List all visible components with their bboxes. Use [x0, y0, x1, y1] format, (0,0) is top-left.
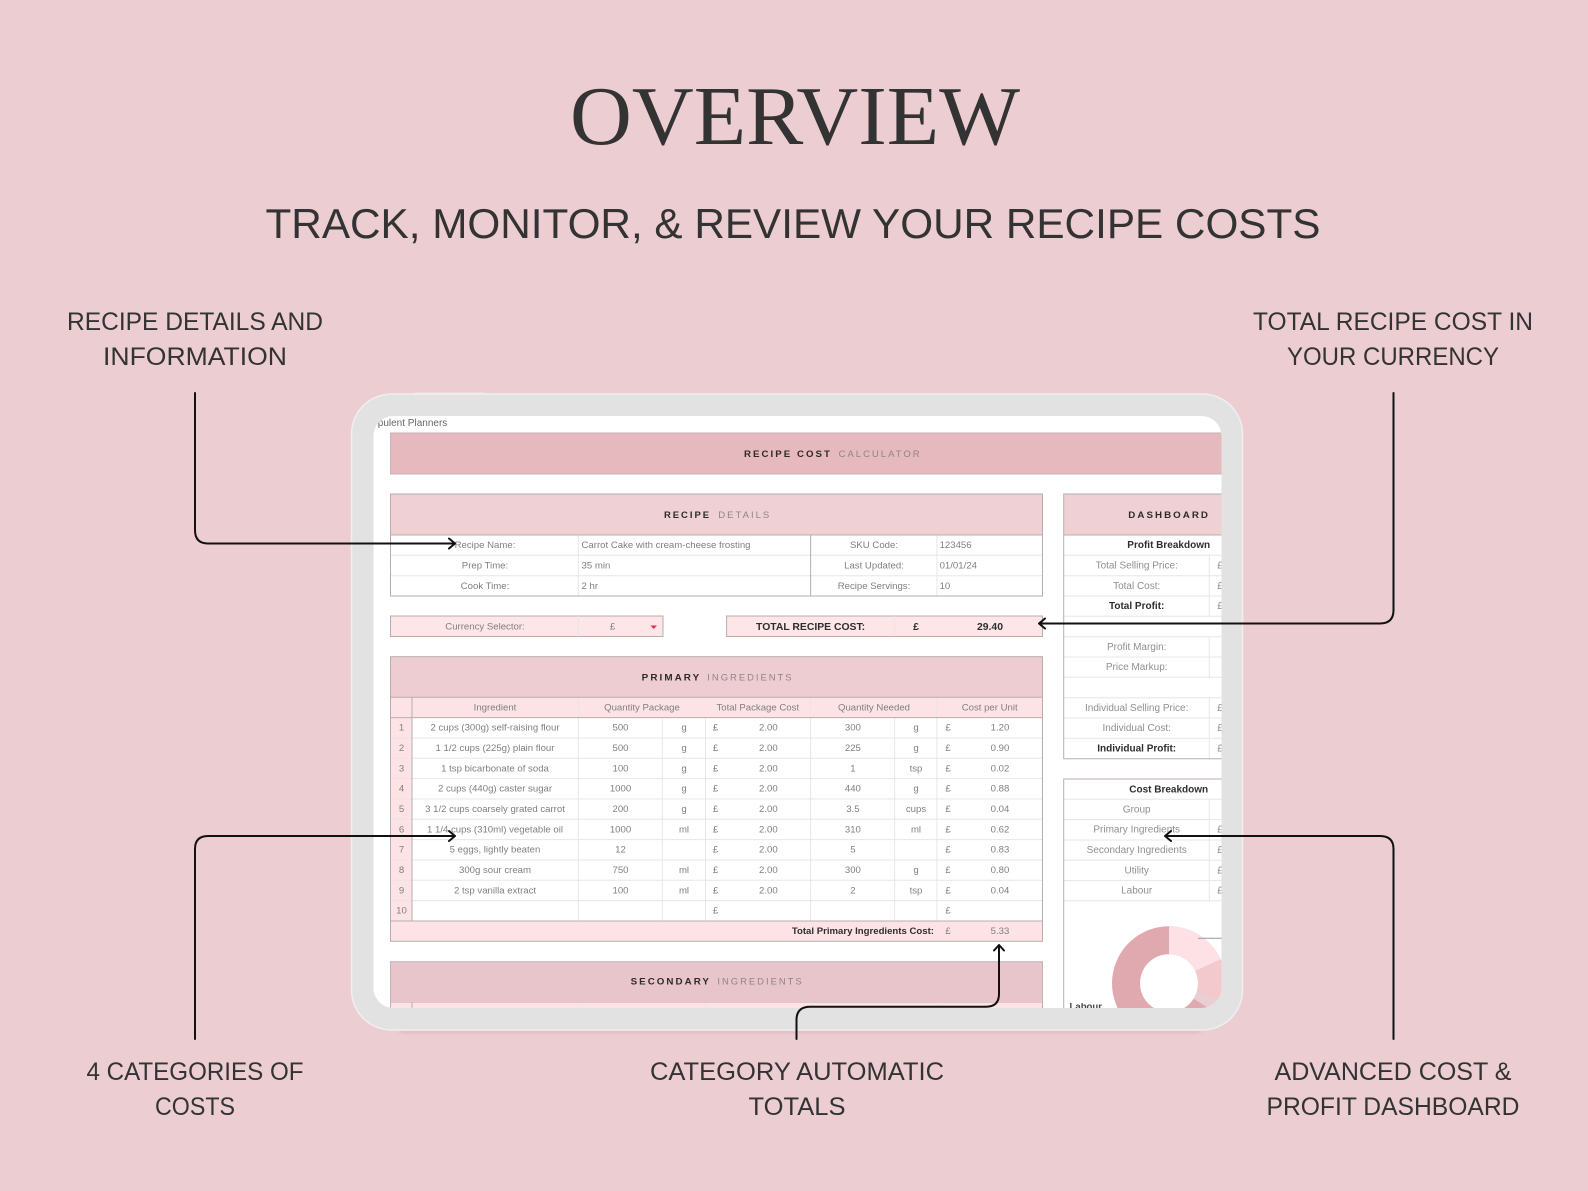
- panel: recipe details: Recipe Name:: [455, 540, 515, 551]
- column headers: Ingredient: [474, 702, 517, 713]
- panel: dashboard profit breakdown: Profit Margin:: [1107, 642, 1166, 653]
- row 7: 12: [615, 845, 626, 856]
- row 5: 2.00: [759, 804, 778, 815]
- row 2: £: [945, 743, 951, 754]
- panel: secondary ingredients: SECONDARY: [631, 976, 711, 988]
- panel: recipe details: SKU Code:: [850, 540, 898, 551]
- total primary ingredients row: 5.33: [991, 926, 1009, 937]
- row 9: tsp: [910, 885, 922, 896]
- spreadsheet screen: [370, 418, 1234, 1026]
- row 5: £: [713, 804, 719, 815]
- row 4: 1000: [610, 784, 631, 795]
- callout text: categories of costs: [86, 1058, 304, 1121]
- row 3: 2.00: [759, 763, 778, 774]
- banner: recipe cost calculator: RECIPE COST: [744, 449, 832, 460]
- panel: cost breakdown: £: [1217, 825, 1223, 836]
- panel: dashboard profit breakdown: £: [1217, 601, 1223, 612]
- row 5: [399, 806, 1010, 814]
- panel: secondary ingredients: INGREDIENTS: [717, 976, 804, 988]
- row 9: 2: [850, 885, 856, 896]
- row 2: [399, 744, 1009, 753]
- callout text: total recipe cost: YOUR CURRENCY: [1287, 343, 1499, 371]
- panel: cost breakdown: Utility: [1124, 865, 1149, 876]
- panel: cost breakdown: Secondary Ingredients: [1087, 845, 1187, 856]
- donut chart: [1126, 940, 1212, 1026]
- currency selector: £: [610, 621, 616, 632]
- row 3: £: [713, 763, 719, 774]
- callout text: categories of costs: COSTS: [155, 1093, 235, 1121]
- column headers: [390, 697, 1042, 718]
- callout text: dashboard: PROFIT DASHBOARD: [1266, 1093, 1520, 1121]
- callout text: dashboard: ADVANCED COST &: [1274, 1058, 1512, 1086]
- callout text: automatic totals: CATEGORY AUTOMATIC: [650, 1058, 944, 1086]
- arrow: recipe details: [195, 393, 455, 548]
- row 4: 2 cups (440g) caster sugar: [438, 784, 553, 795]
- row 2: 2.00: [759, 743, 778, 754]
- panel: recipe details: Last Updated:: [844, 561, 904, 572]
- callout text: total recipe cost: [1253, 308, 1533, 371]
- callout text: automatic totals: TOTALS: [748, 1093, 846, 1121]
- row 5: 3 1/2 cups coarsely grated carrot: [425, 804, 565, 815]
- row 6: ml: [679, 824, 689, 835]
- row 8: 750: [612, 865, 629, 876]
- panel: dashboard profit breakdown: [1064, 494, 1234, 759]
- currency selector: Currency Selector:: [445, 621, 525, 632]
- row 1: £: [945, 723, 951, 734]
- panel: primary ingredients table: INGREDIENTS: [707, 673, 794, 684]
- row 6: 1000: [610, 824, 631, 835]
- callout text: total recipe cost: TOTAL RECIPE COST IN: [1253, 308, 1533, 336]
- row 10: £: [713, 906, 719, 917]
- panel: cost breakdown: [1064, 779, 1223, 1026]
- row 7: 7: [399, 845, 404, 856]
- row 3: £: [945, 763, 951, 774]
- row 5: £: [945, 804, 951, 815]
- column headers: Cost per Unit: [962, 702, 1018, 713]
- row 2: 0.90: [991, 743, 1009, 754]
- row 1: 500: [612, 723, 629, 734]
- callout text: recipe details: INFORMATION: [103, 343, 287, 371]
- total primary ingredients row: [792, 928, 1009, 936]
- column headers: Total Package Cost: [716, 702, 799, 713]
- infographic canvas: [69, 88, 1531, 1115]
- row 4: £: [713, 784, 719, 795]
- row 5: cups: [906, 804, 926, 815]
- panel: dashboard profit breakdown: Profit Breakdown: [1127, 540, 1210, 551]
- panel: dashboard profit breakdown: £: [1217, 744, 1223, 754]
- total recipe cost box: 29.40: [977, 622, 1003, 633]
- arrow: dashboard: [1165, 831, 1394, 1039]
- row 2: 2: [399, 743, 404, 754]
- banner: recipe cost calculator: CALCULATOR: [839, 449, 922, 460]
- row 7: 5: [850, 845, 856, 856]
- panel: dashboard profit breakdown: £: [1217, 703, 1223, 714]
- row 9: 2 tsp vanilla extract: [454, 885, 536, 896]
- panel: recipe details: 01/01/24: [940, 561, 978, 572]
- row 3: 0.02: [991, 763, 1009, 774]
- row 1: g: [913, 723, 919, 734]
- row 9: 9: [399, 885, 404, 896]
- row 4: 2.00: [759, 784, 778, 795]
- panel: recipe details: 123456: [940, 540, 972, 551]
- row 10: 10: [396, 906, 407, 917]
- row 7: 0.83: [991, 845, 1009, 856]
- row 9: [399, 887, 1010, 896]
- row 2: 225: [845, 743, 861, 754]
- row 5: 3.5: [846, 804, 860, 815]
- row 9: 100: [612, 885, 629, 896]
- callout text: categories of costs: 4 CATEGORIES OF: [86, 1058, 304, 1086]
- row 1: 2 cups (300g) self-raising flour: [430, 723, 560, 734]
- chart label: Labour: [1070, 1002, 1102, 1012]
- row 6: 6: [399, 824, 404, 835]
- row 1: 1.20: [991, 723, 1009, 734]
- panel: recipe details: RECIPE: [664, 510, 711, 521]
- arrow: total recipe cost: [1039, 393, 1394, 628]
- panel: secondary ingredients: [390, 962, 1042, 1011]
- row 8: £: [945, 865, 951, 876]
- tablet device: [352, 392, 1242, 1034]
- panel: dashboard profit breakdown: £: [1217, 723, 1223, 734]
- total primary ingredients row: £: [945, 926, 951, 937]
- row 9: 2.00: [759, 885, 778, 896]
- row 5: g: [681, 804, 687, 815]
- banner: recipe cost calculator: [390, 433, 1230, 474]
- panel: dashboard profit breakdown: Individual Selling Price:: [1085, 703, 1188, 714]
- row 4: 0.88: [991, 784, 1009, 795]
- row 5: 0.04: [991, 804, 1010, 815]
- row 3: tsp: [910, 763, 922, 774]
- row 7: £: [713, 845, 719, 856]
- callout text: automatic totals: [650, 1058, 944, 1121]
- row 8: g: [913, 865, 919, 876]
- row 2: £: [713, 743, 719, 754]
- panel: recipe details: Prep Time:: [462, 561, 508, 572]
- row 8: ml: [679, 865, 689, 876]
- row 8: [399, 866, 1009, 875]
- panel: dashboard profit breakdown: Individual Cost:: [1103, 723, 1171, 734]
- row 3: 100: [612, 763, 629, 774]
- panel: dashboard profit breakdown: Total Selling Price:: [1096, 560, 1178, 572]
- row 8: 300: [845, 865, 861, 876]
- row 1: [400, 724, 1009, 732]
- panel: cost breakdown: Group: [1123, 804, 1151, 815]
- row 10: £: [945, 906, 951, 917]
- row 6: 0.62: [991, 824, 1009, 835]
- subtitle: TRACK, MONITOR, & REVIEW YOUR RECIPE COSTS: [266, 200, 1320, 247]
- row 5: 5: [399, 804, 404, 815]
- row 2: 500: [612, 743, 629, 754]
- total recipe cost box: £: [913, 622, 919, 633]
- row 5: 200: [612, 804, 629, 815]
- row 6: ml: [911, 824, 921, 835]
- row 3: 3: [399, 763, 404, 774]
- row 6: £: [945, 824, 951, 835]
- panel: cost breakdown: Labour: [1121, 886, 1153, 897]
- row 4: 4: [399, 784, 405, 795]
- panel: recipe details: 35 min: [582, 561, 610, 572]
- title: OVERVIEW: [570, 70, 1021, 163]
- panel: dashboard profit breakdown: £: [1217, 581, 1223, 592]
- row 4: g: [681, 784, 687, 795]
- row 6: 2.00: [759, 824, 778, 835]
- row 7: 2.00: [759, 845, 778, 856]
- row 10: [396, 907, 950, 914]
- panel: dashboard profit breakdown: DASHBOARD: [1128, 510, 1210, 521]
- row 8: £: [713, 865, 719, 876]
- brand label: Opulent Planners: [370, 418, 447, 429]
- row 1: 2.00: [759, 723, 778, 734]
- row 2: g: [681, 743, 687, 754]
- callout text: recipe details: RECIPE DETAILS AND: [67, 308, 323, 336]
- panel: recipe details: Recipe Servings:: [838, 581, 910, 592]
- row 8: 0.80: [991, 865, 1009, 876]
- row 4: [399, 785, 1009, 794]
- panel: dashboard profit breakdown: Individual Profit:: [1097, 744, 1176, 754]
- panel: cost breakdown: £: [1217, 845, 1223, 856]
- row 6: £: [713, 824, 719, 835]
- row 4: 440: [845, 784, 861, 795]
- row 6: 310: [845, 824, 861, 835]
- panel: cost breakdown: £: [1217, 886, 1223, 897]
- total recipe cost box: [727, 616, 1042, 636]
- row 8: 2.00: [759, 865, 778, 876]
- row 2: g: [913, 743, 919, 754]
- row 7: 5 eggs, lightly beaten: [450, 845, 540, 856]
- row 9: 0.04: [991, 885, 1010, 896]
- panel: dashboard profit breakdown: Price Markup:: [1106, 662, 1168, 673]
- panel: recipe details: DETAILS: [718, 510, 771, 521]
- callout text: dashboard: [1266, 1058, 1520, 1121]
- panel: recipe details: Cook Time:: [461, 581, 509, 592]
- callout text: recipe details: [67, 308, 323, 371]
- row 1: 300: [845, 723, 861, 734]
- panel: cost breakdown: £: [1217, 865, 1223, 876]
- panel: recipe details: Carrot Cake with cream-cheese frosting: [582, 540, 751, 551]
- panel: recipe details: [390, 494, 1042, 596]
- row 1: 1: [399, 723, 404, 734]
- row 6: [399, 826, 1009, 834]
- total primary ingredients row: Total Primary Ingredients Cost:: [792, 926, 934, 937]
- arrow: categories of costs: [195, 831, 455, 1039]
- row 7: [399, 846, 1009, 854]
- row 4: £: [945, 784, 951, 795]
- panel: dashboard profit breakdown: Total Profit:: [1109, 601, 1164, 612]
- panel: primary ingredients table: PRIMARY: [642, 673, 701, 684]
- row 1: g: [681, 723, 687, 734]
- row 6: 1 1/4 cups (310ml) vegetable oil: [427, 824, 563, 835]
- row 9: ml: [679, 885, 689, 896]
- panel: primary ingredients table: [390, 657, 1042, 941]
- panel: dashboard profit breakdown: £: [1217, 560, 1223, 572]
- column headers: Quantity Needed: [838, 702, 910, 713]
- arrow: automatic totals: [796, 945, 1004, 1039]
- chart leader line: [1198, 938, 1222, 939]
- row 9: £: [713, 885, 719, 896]
- panel: recipe details: 10: [940, 581, 950, 592]
- currency selector: [390, 616, 663, 636]
- panel: recipe details: 2 hr: [582, 581, 599, 592]
- row 8: 8: [399, 865, 404, 876]
- row 2: 1 1/2 cups (225g) plain flour: [436, 743, 555, 754]
- row 4: g: [913, 784, 919, 795]
- panel: cost breakdown: Cost Breakdown: [1129, 784, 1208, 795]
- panel: cost breakdown: Primary Ingredients: [1093, 825, 1180, 836]
- icon: dropdown triangle: [650, 626, 657, 629]
- row 3: [399, 765, 1009, 774]
- total recipe cost box: TOTAL RECIPE COST:: [756, 622, 865, 633]
- row 3: g: [681, 763, 687, 774]
- row 3: 1: [850, 763, 856, 774]
- row 3: 1 tsp bicarbonate of soda: [441, 763, 550, 774]
- row 7: £: [945, 845, 951, 856]
- panel: dashboard profit breakdown: Total Cost:: [1113, 581, 1160, 592]
- row 9: £: [945, 885, 951, 896]
- row 1: £: [713, 723, 719, 734]
- column headers: Quantity Package: [604, 702, 680, 713]
- row 8: 300g sour cream: [459, 865, 531, 876]
